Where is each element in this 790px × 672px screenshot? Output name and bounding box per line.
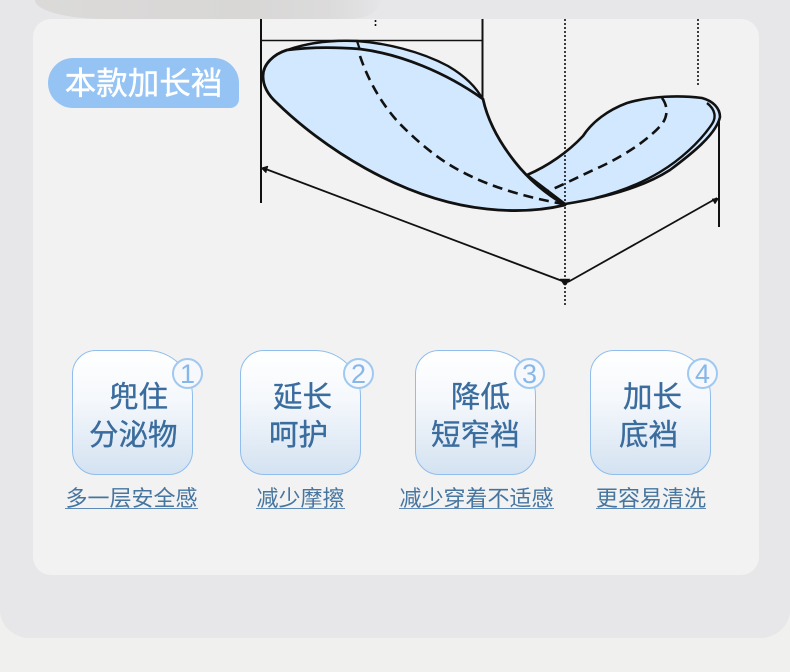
- feature 4 text: 底裆: [619, 419, 678, 452]
- feature 2 badge: [343, 358, 374, 389]
- feature 1 badge: 1: [180, 359, 195, 389]
- feature 4 badge: 4: [695, 359, 710, 389]
- feature 2 badge: 2: [351, 359, 366, 389]
- feature 2 text: [269, 381, 332, 452]
- feature 1 box: [72, 350, 193, 475]
- feature 1 badge: [172, 358, 203, 389]
- feature 3 text: 短窄裆: [431, 419, 520, 452]
- heading pill: 本款加长裆: [65, 65, 222, 101]
- feature 3 text: [431, 381, 520, 452]
- feature 4 box: [590, 350, 711, 475]
- feature 4 badge: [687, 358, 718, 389]
- feature 2 box: [240, 350, 361, 475]
- main card panel: [33, 19, 759, 575]
- heading pill: [48, 58, 239, 108]
- left lobe back layer: [287, 41, 483, 100]
- feature 4 text: 加长: [623, 381, 682, 414]
- feature 4 text: [619, 381, 682, 452]
- feature 1 caption: 多一层安全感: [65, 486, 198, 511]
- top shadow: [35, 0, 380, 19]
- feature 4 caption: 更容易清洗: [596, 486, 706, 511]
- feature 3 badge: 3: [522, 359, 537, 389]
- feature 2 text: 呵护: [269, 419, 328, 452]
- dimension lines: [261, 19, 719, 305]
- right lobe: [527, 96, 720, 204]
- feature 3 badge: [514, 358, 545, 389]
- feature 2 text: 延长: [273, 381, 332, 414]
- feature 1 text: 兜住: [109, 381, 168, 414]
- feature 3 box: [415, 350, 536, 475]
- feature 3 text: 降低: [451, 381, 510, 414]
- feature 3 caption: 减少穿着不适感: [399, 486, 554, 511]
- feature 1 text: [89, 381, 178, 452]
- feature 1 text: 分泌物: [89, 419, 178, 452]
- feature 2 caption: 减少摩擦: [256, 486, 344, 511]
- left lobe: [263, 41, 565, 211]
